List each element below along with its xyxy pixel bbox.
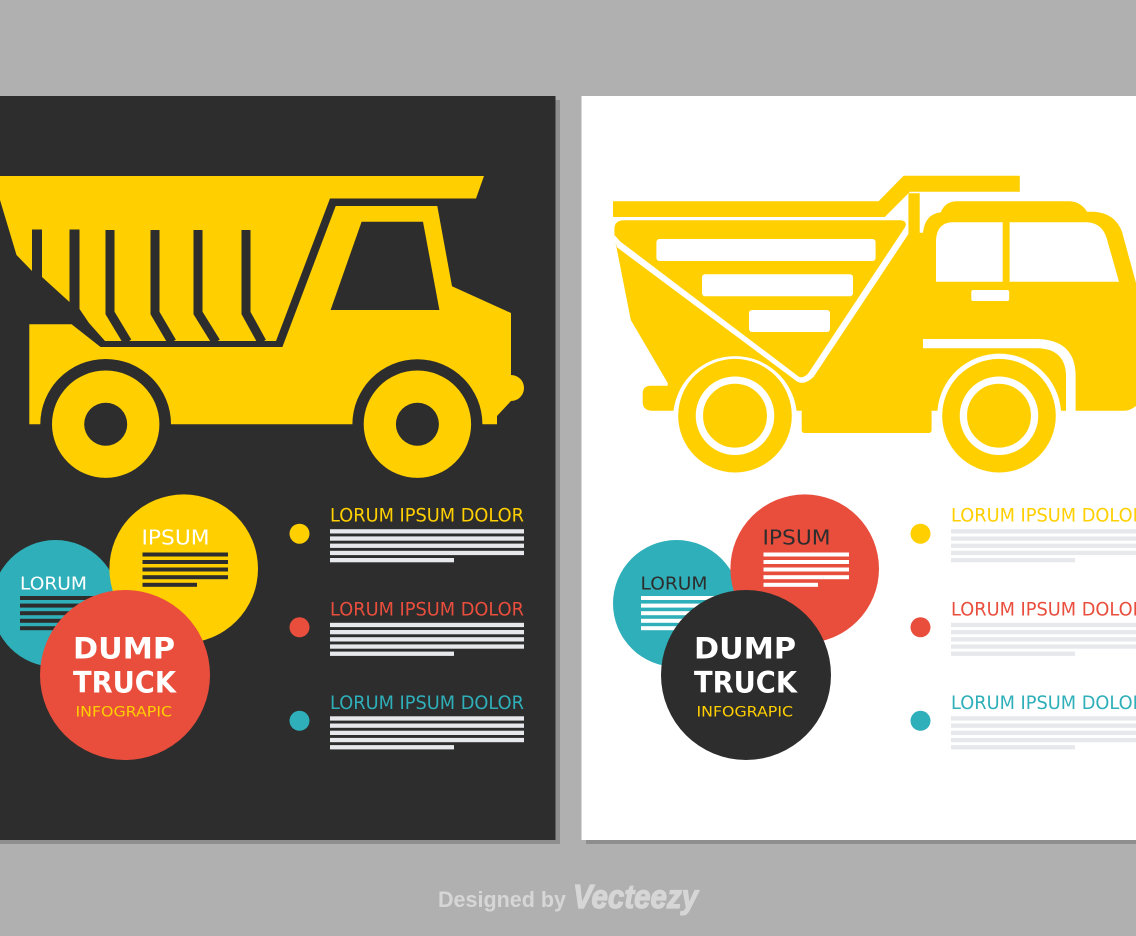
list item: teal xyxy=(290,693,524,749)
footer credit: Designed by xyxy=(438,887,567,912)
list item: teal: LORUM IPSUM DOLOR xyxy=(330,693,524,714)
list item: yellow: LORUM IPSUM DOLOR xyxy=(330,506,524,527)
list item: red: LORUM IPSUM DOLOR xyxy=(330,599,524,620)
circle: dump truck title: DUMP xyxy=(694,632,796,666)
circle: dump truck title: TRUCK xyxy=(694,666,798,700)
circle: ipsum xyxy=(109,494,258,643)
circle: dump truck title xyxy=(40,590,210,760)
circle: dump truck title: INFOGRAPIC xyxy=(76,705,172,721)
circle: lorum xyxy=(613,540,740,667)
circle: lorum xyxy=(0,540,119,667)
list item: yellow xyxy=(910,506,1136,562)
panel: dark version xyxy=(0,96,560,844)
circle: dump truck title xyxy=(661,590,831,760)
circle: ipsum xyxy=(730,494,879,643)
footer credit xyxy=(438,878,699,915)
circle: ipsum: IPSUM xyxy=(142,525,210,549)
circle: lorum: LORUM xyxy=(20,574,87,594)
icon: white panel dump truck xyxy=(613,176,1136,473)
circle: dump truck title: INFOGRAPIC xyxy=(696,705,793,721)
list item: red xyxy=(910,599,1136,656)
list item: red xyxy=(290,599,524,656)
circle: dump truck title: TRUCK xyxy=(73,666,177,700)
list item: yellow xyxy=(290,506,524,562)
panel: white version xyxy=(582,96,1136,844)
list item: teal xyxy=(910,693,1136,749)
circle: dump truck title: DUMP xyxy=(73,632,175,666)
icon: dark panel dump truck xyxy=(0,176,524,478)
circle: ipsum: IPSUM xyxy=(762,525,830,549)
circle: lorum: LORUM xyxy=(640,574,708,594)
footer credit: Vecteezy xyxy=(573,878,699,915)
